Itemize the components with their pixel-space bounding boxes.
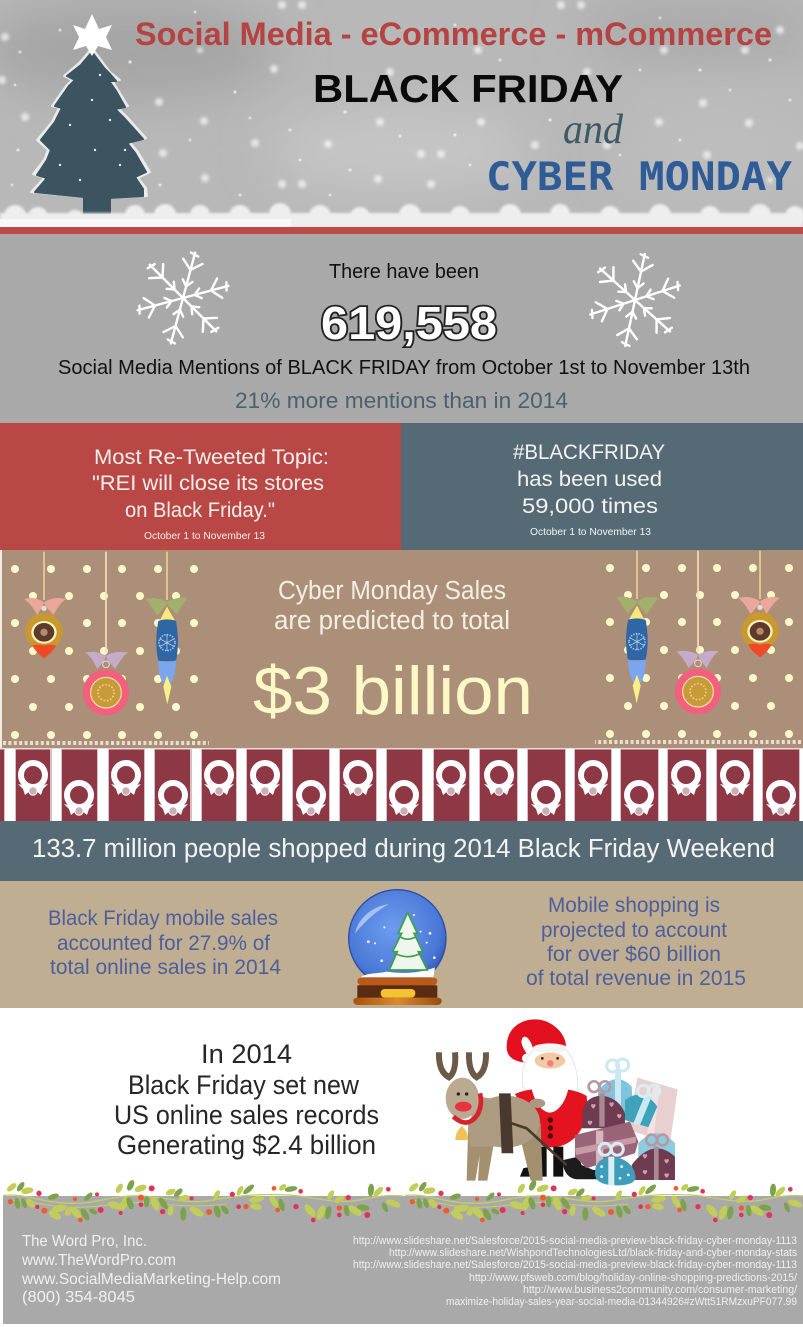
text: mentions: Social Media Mentions of BLACK FRIDAY from October 1st to November 13th [58, 356, 750, 379]
text: contact details: www.SocialMediaMarketing-Help.com [21, 1271, 281, 1288]
text: mobile sales left: Black Friday mobile sales [48, 906, 278, 930]
snow flakes [0, 1, 803, 188]
text: mobile sales left: total online sales in 2014 [50, 955, 281, 979]
text: contact details: www.TheWordPro.com [21, 1252, 176, 1269]
text: sources [353, 1235, 798, 1308]
text: predicted: Cyber Monday Sales [278, 577, 506, 605]
panel: header [0, 0, 803, 234]
decorative garland [3, 1180, 803, 1222]
decorative wreath band [0, 748, 803, 821]
title: Black Friday: BLACK FRIDAY [313, 68, 623, 111]
panel: cyber monday sales [0, 550, 803, 748]
panel: blackfriday hashtag: October 1 to November 13 [530, 526, 651, 538]
panel: most re-tweeted topic: Most Re-Tweeted Topic: [94, 445, 329, 469]
red stripe [0, 227, 803, 234]
text: 21% more: 21% more mentions than in 2014 [235, 388, 568, 413]
panel: mobile sales [0, 881, 803, 1008]
panel: blackfriday hashtag [401, 423, 803, 550]
text: sales records: Generating $2.4 billion [117, 1130, 376, 1160]
panel: shoppers banner: 133.7 million people shopped during 2014 Black Friday Weekend [32, 835, 775, 863]
title: Social Media eCommerce mCommerce: Social Media - eCommerce - mCommerce [135, 16, 772, 52]
panel: footer [3, 1196, 803, 1324]
text: mobile sales left: accounted for 27.9% of [57, 931, 270, 955]
panel: cyber monday sales: are predicted to total [274, 607, 510, 635]
title: and: and [563, 107, 624, 153]
text: mobile sales left [48, 906, 281, 979]
text: mobile shopping right: for over $60 billion [547, 942, 721, 966]
text: contact details: The Word Pro, Inc. [22, 1233, 147, 1250]
panel: blackfriday hashtag: #BLACKFRIDAY [513, 440, 665, 464]
text: sales records: Black Friday set new [128, 1070, 360, 1100]
text: mobile shopping right [526, 893, 746, 990]
icon: left snowflake [127, 241, 239, 355]
text: sales records: In 2014 [201, 1039, 292, 1069]
text: mobile shopping right: Mobile shopping is [548, 893, 720, 917]
text: sales records [114, 1039, 379, 1160]
panel: most re-tweeted topic: on Black Friday." [125, 498, 275, 522]
text: sources: http://www.business2community.com/consumer-marketing/ [523, 1284, 798, 1296]
text: contact details: (800) 354-8045 [22, 1289, 135, 1306]
ornaments right [595, 551, 801, 742]
panel: most re-tweeted topic: "REI will close its stores [92, 471, 324, 495]
icon: santa, reindeer and presents [439, 1019, 678, 1185]
icon: star [73, 14, 112, 56]
text: mobile shopping right: projected to account [541, 918, 727, 942]
ornaments left [3, 552, 209, 743]
text: sales records: US online sales records [114, 1100, 379, 1130]
number: 619,558: 619,558 [321, 297, 497, 349]
text: contact details [21, 1233, 281, 1306]
text: mobile shopping right: of total revenue in 2015 [526, 966, 746, 990]
snow ground [0, 203, 803, 228]
icon: snow globe [349, 890, 446, 1005]
icon: right snowflake [581, 245, 689, 355]
icon: christmas tree [31, 48, 150, 213]
text: sources: http://www.pfsweb.com/blog/holiday-online-shopping-predictions-2015/ [469, 1272, 798, 1284]
panel: shoppers banner [0, 821, 803, 881]
number: $3 billion: $3 billion [253, 653, 533, 729]
panel: blackfriday hashtag: 59,000 times [522, 494, 658, 518]
panel: online sales records [0, 1008, 803, 1198]
title: Cyber Monday: CYBER MONDAY [486, 155, 793, 200]
panel: social media mentions [0, 234, 803, 423]
panel: blackfriday hashtag: has been used [517, 467, 662, 491]
panel: most re-tweeted topic [0, 423, 401, 550]
text: there have been: There have been [329, 261, 479, 283]
panel: most re-tweeted topic: October 1 to November 13 [144, 530, 265, 542]
